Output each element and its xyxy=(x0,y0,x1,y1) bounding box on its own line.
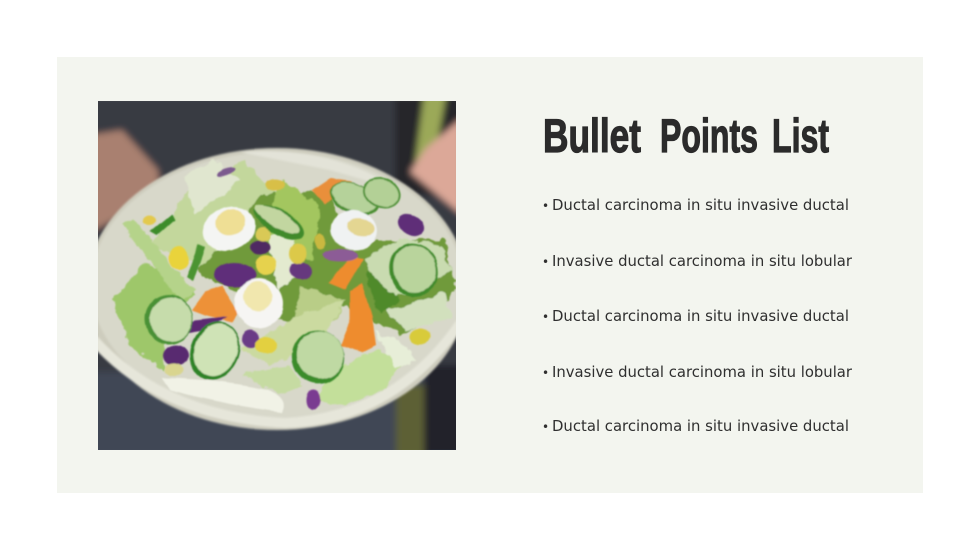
title xyxy=(543,109,829,162)
bullet item 4: Invasive ductal carcinoma in situ lobular xyxy=(552,363,853,381)
bullet item 4: • xyxy=(542,366,549,380)
bullet item 5: • xyxy=(542,420,549,434)
salad xyxy=(113,160,456,406)
eggs xyxy=(202,206,257,252)
title: Bullet xyxy=(543,109,641,162)
bullet list xyxy=(542,196,853,435)
plate xyxy=(86,148,468,430)
bullet item 3: Ductal carcinoma in situ invasive ductal xyxy=(552,307,849,325)
bullet item 1: • xyxy=(542,199,549,213)
panel: background xyxy=(57,57,923,493)
photo: salad bowl held by a person xyxy=(86,95,468,457)
purple cabbage xyxy=(214,263,256,287)
title: Points xyxy=(660,109,758,162)
corn xyxy=(169,246,189,270)
bullet item 1: Ductal carcinoma in situ invasive ductal xyxy=(552,196,849,214)
bullet item 5: Ductal carcinoma in situ invasive ductal xyxy=(552,417,849,435)
apron and background xyxy=(90,95,465,457)
bullet item 2: • xyxy=(542,255,549,269)
cucumbers xyxy=(328,180,380,216)
carrots xyxy=(192,286,238,322)
title: List xyxy=(772,109,829,162)
lettuce xyxy=(150,160,282,265)
bullet item 3: • xyxy=(542,310,549,324)
bullet item 2: Invasive ductal carcinoma in situ lobular xyxy=(552,252,853,270)
